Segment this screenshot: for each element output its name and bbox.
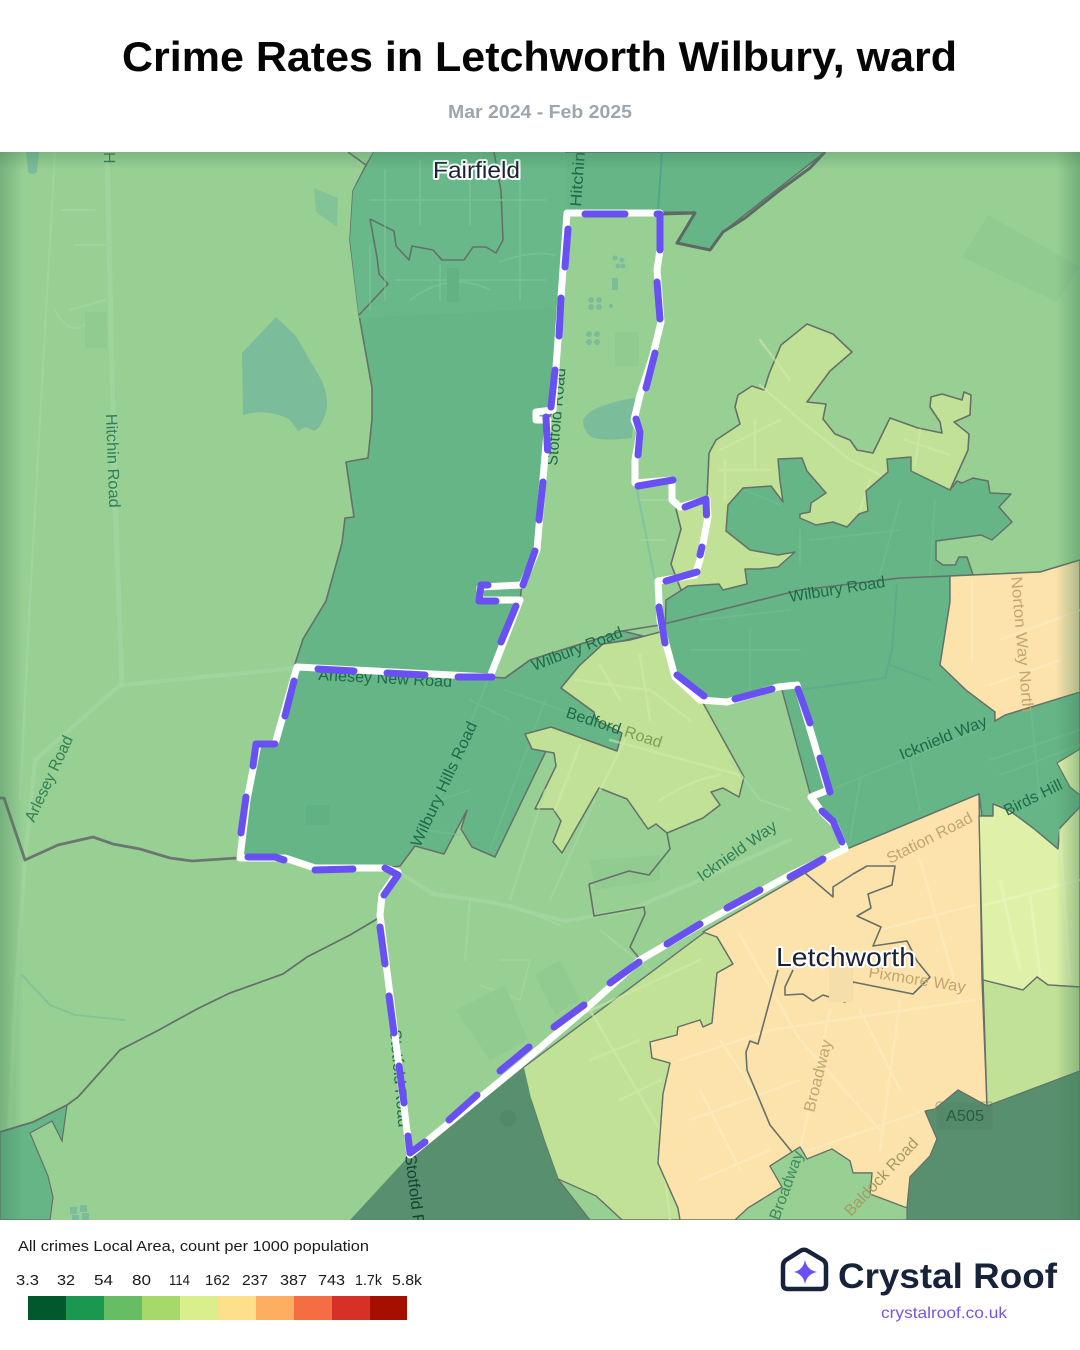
town centre square (829, 981, 853, 1002)
ward boundary: white base with purple dashes (240, 213, 845, 1155)
region: south pale green (520, 932, 733, 1220)
Norton Way streets (972, 580, 1080, 685)
label: Wilbury Road east: Wilbury Road (788, 574, 886, 606)
region: mid green Arlesey New Road block and Wilbury Hills strip (240, 631, 643, 868)
label: Norton Way North: Norton Way North (1007, 576, 1036, 713)
Fairfield streets (370, 160, 555, 310)
Letchworth inner boundaries (746, 866, 930, 1152)
label: Arlesey New Road: Arlesey New Road (318, 667, 452, 691)
west boundary, thick (0, 798, 237, 861)
lakes and ponds (26, 152, 635, 440)
field block (306, 805, 330, 825)
region: mid green Fairfield and west of ward (294, 152, 825, 677)
region: pale yellow-green east (979, 804, 1080, 990)
field inside Fairfield south (447, 279, 459, 284)
label: Arlesey Road: Arlesey Road (22, 733, 77, 825)
region: small light green south (558, 1179, 622, 1220)
place label: Fairfield: Fairfield (433, 157, 520, 183)
region: Wilbury estate pale green (671, 324, 971, 590)
choropleth map (0, 151, 1080, 1227)
region: pale corner near Birds Hill (1057, 749, 1080, 795)
region: bottom green south of Letchworth (735, 1147, 907, 1220)
central light-green streets (399, 760, 790, 1000)
label: Hitchin top: Hitchin (568, 151, 589, 207)
label: Station Road: Station Road (884, 810, 976, 868)
label: Wilbury Road west: Wilbury Road (529, 624, 625, 675)
label: Stotfold Road lower: Stotfold Road (386, 1029, 411, 1128)
ward inner strip: mid green (781, 688, 824, 794)
Fairfield north heavier boundary (660, 152, 825, 250)
subtitle: date range: Mar 2024 - Feb 2025 (448, 102, 632, 122)
central ward-border lines (589, 833, 670, 958)
label: Wilbury Hills Road: Wilbury Hills Road (408, 719, 481, 850)
region: dark green south centre (350, 1063, 590, 1220)
Letchworth streets (680, 860, 975, 1180)
place label: Letchworth: Letchworth (776, 942, 915, 972)
legend (16, 1238, 423, 1320)
label: Pixmore Way: Pixmore Way (867, 964, 967, 996)
region: pale green south east (983, 977, 1080, 1106)
region: Bedford Road pale green (525, 632, 744, 853)
label: Bedford Road: Bedford Road (564, 705, 664, 752)
label: Broadway south: Broadway (767, 1149, 807, 1222)
Wilbury Road boundary (505, 560, 1080, 678)
label: Icknield Way west: Icknield Way (695, 818, 780, 885)
east mid green streets (1031, 708, 1080, 746)
title: Crime Rates in Letchworth Wilbury, ward (122, 33, 957, 80)
ward interior field (615, 332, 639, 366)
icon: house with star (783, 1250, 826, 1289)
ward interior features: ponds and tanks (586, 256, 626, 345)
logo wordmark: Crystal Roof (838, 1257, 1057, 1296)
small field rectangles (85, 319, 91, 326)
Wilbury Hills streets (453, 833, 461, 836)
region: dark green south east (907, 1071, 1080, 1220)
legend values: 1.7k (355, 1272, 382, 1289)
east pale streets (985, 830, 1080, 980)
label: Baldock Road: Baldock Road (841, 1135, 922, 1220)
legend values: 743 (318, 1272, 345, 1289)
legend values: 80 (132, 1272, 151, 1289)
legend values (16, 1272, 423, 1289)
central fields (494, 990, 510, 997)
label: H fragment: H (100, 152, 117, 164)
legend values: 237 (242, 1272, 268, 1289)
road labels (22, 151, 1065, 1227)
region: Norton Way peach (940, 560, 1080, 721)
region: Letchworth centre peach (650, 794, 987, 1220)
label: Stotfold Road upper: Stotfold Road (544, 367, 570, 466)
legend values: 162 (205, 1272, 230, 1289)
stream (800, 585, 930, 690)
logo: Crystal Roof (783, 1250, 1057, 1322)
south west boundary (0, 919, 377, 1132)
A505 road sign: A505 (946, 1108, 984, 1125)
Wilbury estate streets (720, 340, 950, 510)
region: mid green east of ward, with Wilbury Road (665, 457, 1080, 849)
legend colour scale (28, 1296, 407, 1320)
small solar farm icon (70, 1205, 89, 1220)
label: Stotfold Road south: Stotfold R (401, 1153, 427, 1227)
legend values: 54 (94, 1272, 113, 1289)
legend values: 32 (57, 1272, 75, 1289)
A505 road sign (936, 1102, 993, 1130)
label: Hitchin Road: Hitchin Road (102, 414, 122, 508)
label: Birds Hill: Birds Hill (1001, 777, 1065, 820)
legend title: All crimes Local Area, count per 1000 population (18, 1238, 369, 1255)
west side roads and rural tracks (120, 682, 124, 687)
stream on west (22, 975, 125, 1020)
label: Broadway centre: Broadway (801, 1038, 836, 1114)
legend values: 114 (169, 1272, 190, 1289)
Fairfield estate, slightly lighter streets (350, 152, 568, 318)
website link: crystalroof.co.uk (881, 1305, 1008, 1322)
map edge vignette (0, 152, 1080, 1220)
dark centre spot (500, 1110, 516, 1126)
legend values: 3.3 (16, 1272, 39, 1289)
region: base light green (0, 152, 1080, 1220)
south pale streets (570, 960, 700, 1220)
Bedford streets (555, 655, 740, 810)
region: south west corner mid green (0, 1105, 67, 1220)
railway inside ward (637, 490, 655, 580)
legend values: 5.8k (392, 1272, 423, 1289)
legend values: 387 (280, 1272, 307, 1289)
label: Icknield Way east: Icknield Way (897, 713, 990, 764)
